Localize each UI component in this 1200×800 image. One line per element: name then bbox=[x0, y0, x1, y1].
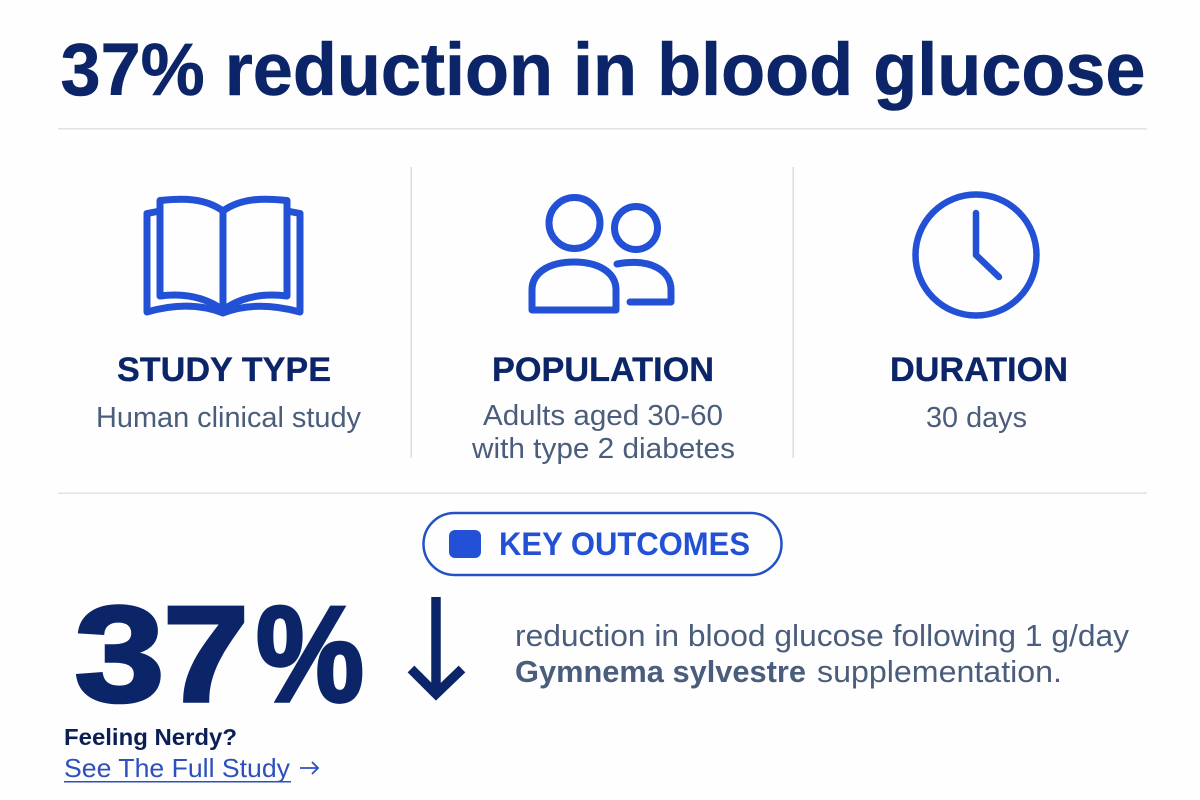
heading: duration: DURATION bbox=[890, 351, 1068, 389]
text: study type value: Human clinical study bbox=[96, 402, 362, 434]
badge: key outcomes bbox=[424, 513, 782, 575]
big stat: 37%: 7 bbox=[163, 578, 249, 730]
text: duration value: 30 days bbox=[926, 402, 1027, 434]
text: outcome description: supplementation. bbox=[817, 654, 1062, 689]
panel: duration bbox=[890, 194, 1068, 434]
text: population value: with type 2 diabetes bbox=[471, 433, 735, 465]
arrow: down bbox=[411, 597, 462, 695]
panel: population bbox=[471, 198, 735, 465]
heading: population: POPULATION bbox=[492, 351, 714, 389]
link: see the full study: See The Full Study bbox=[64, 753, 290, 783]
big stat: 37%: % bbox=[256, 578, 364, 730]
badge: key outcomes: KEY OUTCOMES bbox=[499, 526, 750, 562]
title: 37% reduction in blood glucose bbox=[60, 28, 1146, 111]
text: outcome description: reduction in blood glucose following 1 g/day bbox=[515, 618, 1130, 653]
heading: study type: STUDY TYPE bbox=[117, 351, 331, 389]
icon: open book bbox=[147, 199, 300, 313]
text: feeling nerdy: Feeling Nerdy? bbox=[64, 724, 237, 750]
text: population value: Adults aged 30-60 bbox=[483, 400, 723, 432]
icon: clock bbox=[916, 194, 1036, 316]
big stat: 37%: 3 bbox=[74, 578, 164, 730]
panel: study type bbox=[96, 199, 362, 434]
icon: two people bbox=[532, 198, 671, 310]
text: outcome description: Gymnema sylvestre bbox=[515, 654, 806, 689]
